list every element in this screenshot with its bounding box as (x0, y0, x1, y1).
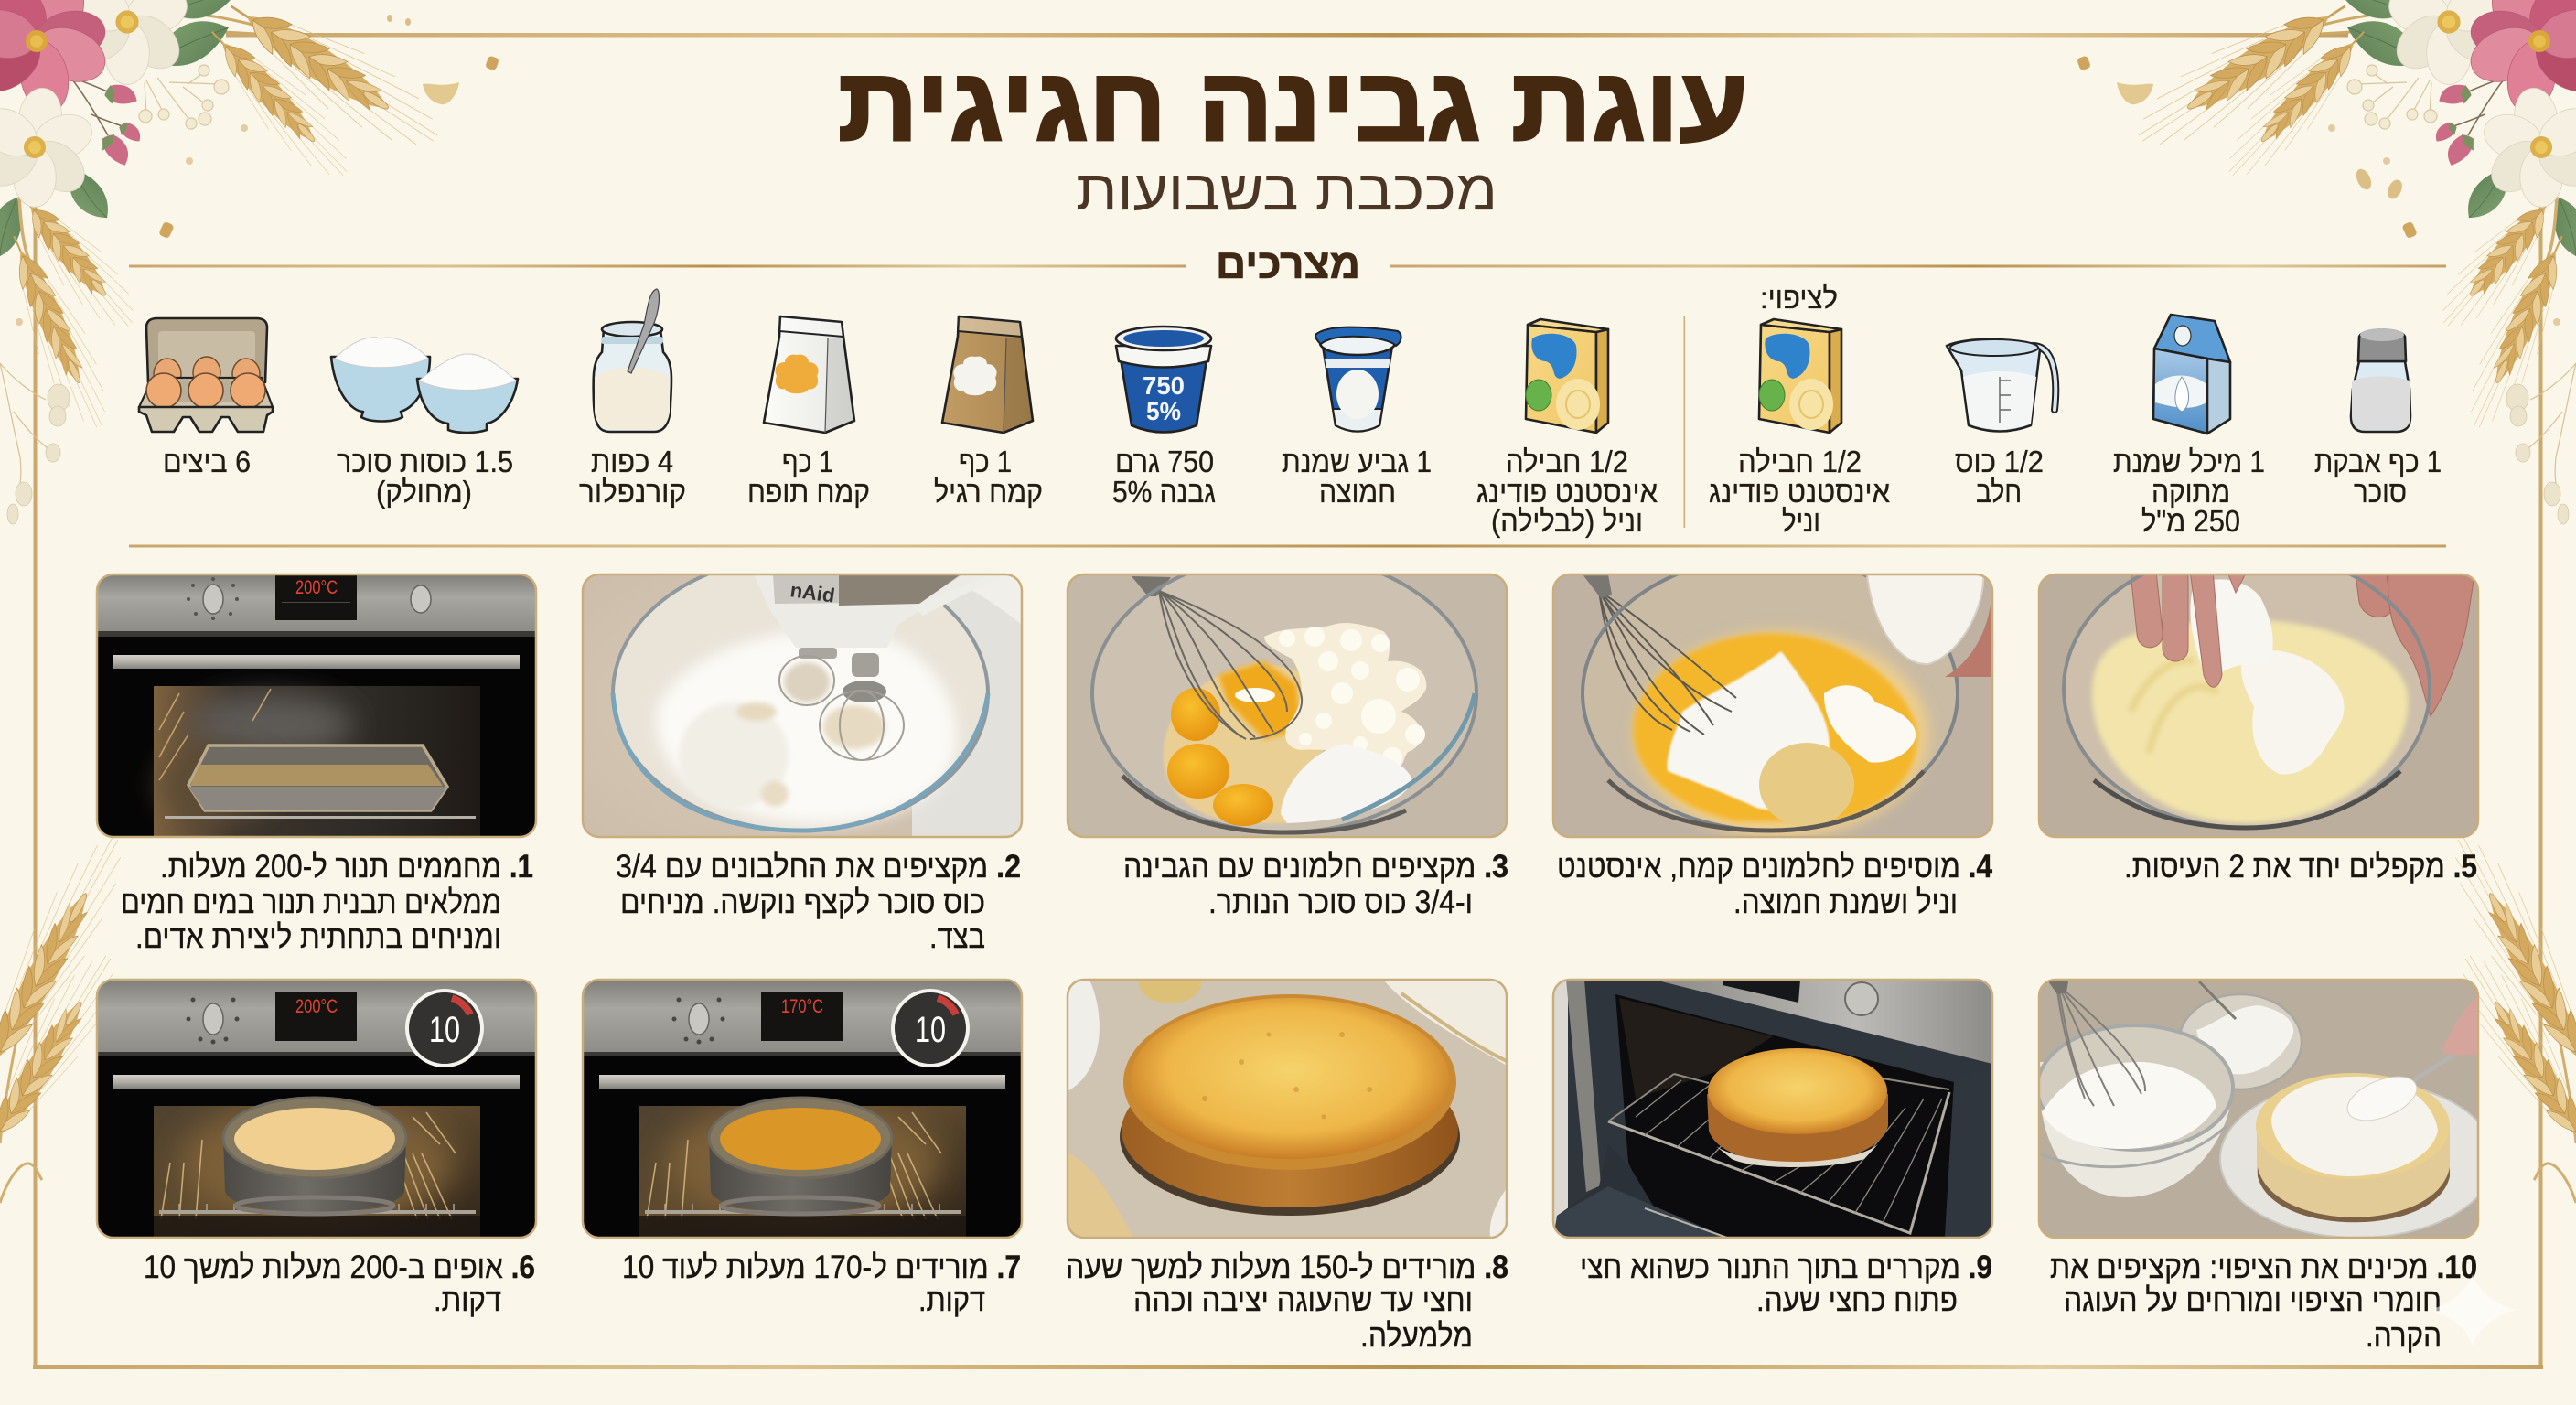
step text: ו-3/4 כוס סוכר הנותר. (1208, 885, 1473, 920)
step text: חומרי הציפוי ומורחים על העוגה (2064, 1282, 2442, 1318)
step text: ומניחים בתחתית ליצירת אדים. (135, 919, 501, 955)
step text: 10. מכינים את הציפוי: מקציפים את (2050, 1249, 2477, 1285)
ingredient: cheese tub: 750 (1143, 371, 1185, 400)
label: 1 כף אבקת (2314, 445, 2442, 478)
divider between batter and topping (1683, 316, 1685, 528)
step text: 6. אופים ב-200 מעלות למשך 10 (144, 1249, 535, 1285)
wheat: bottom right (2435, 825, 2576, 1203)
step text: מלמעלה. (1360, 1318, 1473, 1354)
label: 1 כף (959, 445, 1012, 478)
ingredient: plain flour (934, 316, 1043, 509)
sparkle watermark (2430, 1274, 2516, 1346)
label: מתוקה (2152, 475, 2230, 509)
label: 4 כפות (591, 445, 673, 478)
topping label: לציפוי: (1760, 281, 1838, 315)
label: וניל (1782, 504, 1820, 538)
ingredient: powdered sugar shaker (2314, 328, 2442, 509)
grain decoration (387, 15, 2405, 201)
label: 1.5 כוסות סוכר (337, 445, 513, 478)
ingredient: cheese tub: 5% (1146, 397, 1181, 425)
ingredient: sugar (331, 338, 518, 509)
step 10 (2037, 980, 2495, 1354)
ingredient: sour cream (1282, 327, 1432, 509)
step text: כוס סוכר לקצף נוקשה. מניחים (620, 885, 985, 920)
step text (1580, 1249, 1992, 1318)
ingredient: vanilla pudding for batter (1476, 319, 1658, 538)
label: אינסטנט פודינג (1476, 475, 1658, 509)
step text (1123, 849, 1508, 920)
step 3 (1068, 554, 1508, 920)
ingredient: eggs (139, 318, 273, 478)
photo: whipping egg whites: nAid (789, 578, 836, 607)
label: אינסטנט פודינג (1709, 475, 1890, 509)
photo: yolks with cheese and sugar (1068, 554, 1507, 837)
step text: פתוח כחצי שעה. (1756, 1282, 1958, 1318)
step text (616, 849, 1021, 955)
photo: baking at 170 degrees with timer: 170°C (781, 996, 823, 1017)
photo: baked cheesecake on counter (1068, 963, 1508, 1238)
floral corner: top right (2077, 0, 2576, 524)
ingredient: self-raising flour (747, 316, 870, 509)
photo: spreading topping on cake (2037, 980, 2495, 1238)
step 6 (97, 980, 536, 1318)
label: קמח רגיל (934, 475, 1043, 509)
label: 250 מ"ל (2141, 504, 2240, 538)
step text: 8. מורידים ל-150 מעלות למשך שעה (1066, 1249, 1508, 1285)
step text: 3. מקציפים חלמונים עם הגבינה (1123, 849, 1508, 885)
step text (1557, 849, 1992, 920)
step 5 (2039, 550, 2478, 885)
photo: baking at 170 degrees with timer: 10 (915, 1010, 946, 1050)
step text: 2. מקציפים את החלבונים עם 3/4 (616, 849, 1021, 885)
step text: הקרה. (2366, 1318, 2442, 1354)
step 8 (1066, 963, 1508, 1354)
step text: בצד. (929, 919, 985, 955)
ingredient: milk (1947, 339, 2055, 509)
ingredients heading with dividers: מצרכים (1216, 241, 1360, 287)
step text: וחצי עד שהעוגה יציבה וכהה (1133, 1282, 1473, 1318)
step text (1066, 1249, 1508, 1354)
step text (622, 1249, 1021, 1318)
label: 1/2 חבילה (1506, 445, 1628, 478)
label: סוכר (2354, 475, 2407, 509)
step text: 5. מקפלים יחד את 2 העיסות. (2124, 849, 2477, 885)
ingredient: whipping cream (2113, 315, 2265, 538)
floral corner: top left (0, 0, 499, 524)
label: 1 כף (782, 445, 833, 478)
ingredient: cheese tub (1112, 327, 1216, 509)
label: 1 מיכל שמנת (2113, 445, 2265, 478)
photo: baking at 200 degrees with timer: 10 (429, 1010, 460, 1050)
step 2 (583, 556, 1022, 955)
photo: adding flour, pudding and sour cream (1553, 556, 1992, 837)
ingredients row (139, 281, 2442, 538)
subtitle: מככבת בשבועות (1076, 159, 1497, 222)
step text (121, 849, 533, 955)
photo: cooling in half open oven (1553, 980, 1992, 1238)
photo: oven preheating with water pan: 200°C (295, 577, 338, 598)
ingredients heading with dividers (129, 241, 2446, 287)
label: קורנפלור (579, 475, 686, 509)
label: חמוצה (1319, 475, 1396, 509)
step text: 9. מקררים בתוך התנור כשהוא חצי (1580, 1249, 1992, 1285)
label: (מחולק) (376, 475, 472, 509)
step text: ממלאים תבנית תנור במים חמים (121, 885, 501, 920)
label: וניל (לבלילה) (1491, 504, 1643, 538)
photo: whipping egg whites (583, 556, 1022, 837)
step text (2050, 1249, 2477, 1354)
photo: baking at 200 degrees with timer (97, 980, 536, 1238)
photo: baking at 170 degrees with timer (583, 980, 1022, 1238)
step 7 (583, 980, 1022, 1318)
title: עוגת גבינה חגיגית (838, 47, 1748, 162)
step 4 (1553, 556, 1992, 920)
step text: 1. מחממים תנור ל-200 מעלות. (160, 849, 533, 885)
label: 6 ביצים (163, 445, 251, 478)
label: קמח תופח (747, 475, 870, 509)
step 9 (1553, 980, 1992, 1318)
ingredient: cornflour jar (579, 289, 686, 509)
photo: baking at 200 degrees with timer: 200°C (295, 996, 338, 1017)
step text: 4. מוסיפים לחלמונים קמח, אינסטנט (1557, 849, 1992, 885)
step text: דקות. (434, 1282, 501, 1318)
step text: דקות. (918, 1282, 985, 1318)
step text: 7. מורידים ל-170 מעלות לעוד 10 (622, 1249, 1021, 1285)
step text: וניל ושמנת חמוצה. (1733, 885, 1958, 920)
step 1 (97, 574, 536, 955)
photo: oven preheating with water pan (97, 574, 536, 837)
label: חלב (1976, 475, 2022, 509)
step text (144, 1249, 535, 1318)
label: גבנה 5% (1112, 475, 1216, 509)
label: 750 גרם (1115, 445, 1214, 478)
ingredient: vanilla pudding for topping (1709, 319, 1890, 538)
wheat: bottom left (0, 825, 141, 1203)
photo: folding the two batters (2039, 550, 2478, 837)
label: 1/2 כוס (1955, 445, 2044, 478)
label: 1 גביע שמנת (1282, 445, 1432, 478)
label: 1/2 חבילה (1738, 445, 1862, 478)
